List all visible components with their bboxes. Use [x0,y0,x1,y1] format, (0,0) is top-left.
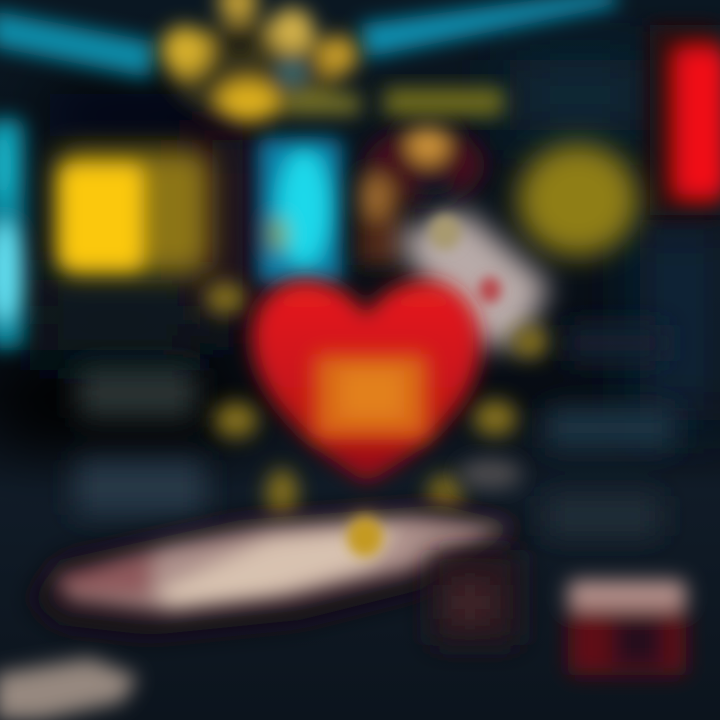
olive circle panel [518,144,638,256]
book pages [52,516,510,612]
paper bottom left [0,658,138,720]
ceiling band: left teal [0,10,155,78]
gift box [568,580,686,675]
yellow panel [56,150,210,274]
olive title bar [384,88,504,116]
grey chip [458,459,522,489]
playing cards behind heart [395,210,550,345]
maroon figure behind heart [358,127,485,265]
ceiling band: right teal [360,0,620,58]
left cyan panel [0,118,24,348]
gold accents around heart [205,282,548,557]
heart body [252,280,480,482]
golden coin over the book [347,517,383,557]
card details [429,214,501,303]
background shadows [0,60,720,445]
open book [30,505,525,635]
yellow panel highlight [60,164,144,270]
red neon panel [650,25,720,215]
dark stack by the book [430,550,520,645]
cyan center panel [258,138,342,284]
right info panels [545,325,675,536]
left info panels [75,368,205,515]
heart [252,280,480,482]
orange square on heart [314,354,428,438]
chandelier of gold lights [161,0,360,122]
